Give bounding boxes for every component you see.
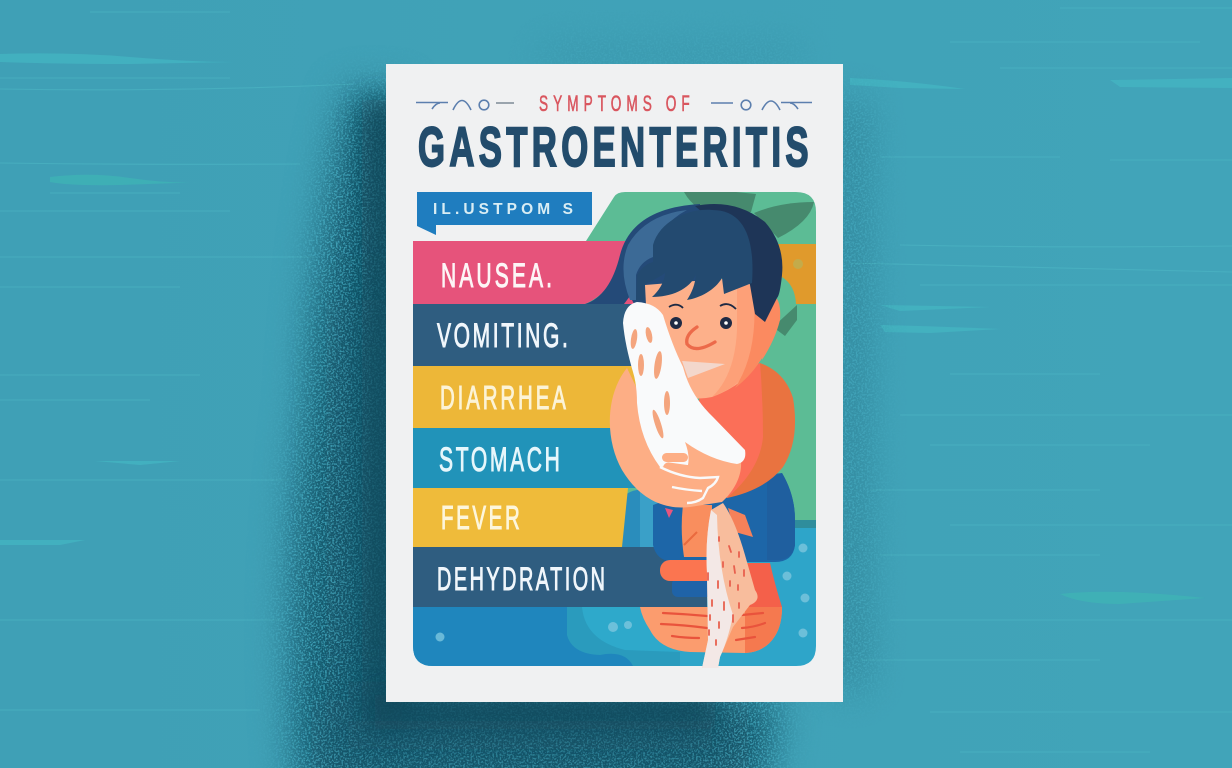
- nose: [687, 327, 715, 349]
- eyes: [669, 304, 736, 329]
- heading ornament right: [711, 100, 812, 110]
- torso centre: [682, 505, 712, 557]
- symptom bar: stomach: STOMACH: [439, 440, 560, 478]
- symptom bar: dehydration: [413, 547, 707, 607]
- leaves: [684, 190, 814, 336]
- symptom bar: fever: [413, 488, 628, 547]
- trousers: [653, 473, 795, 562]
- hair right: [695, 204, 782, 322]
- panel background: [413, 192, 816, 666]
- symptom bar: vomiting: [413, 304, 638, 366]
- hair highlight: [623, 210, 687, 300]
- ear: [762, 293, 780, 360]
- seat behind character: [622, 490, 658, 547]
- towel: [623, 302, 745, 467]
- symptom bar: dehydration: DEHYDRATION: [437, 561, 605, 597]
- symptom bar: fever: FEVER: [441, 499, 520, 536]
- bubbles: [436, 544, 810, 642]
- tag label: IL.USTPOM S: [433, 201, 573, 218]
- shirt tail: [728, 508, 753, 537]
- poster card: [386, 64, 843, 702]
- tag label: [417, 192, 592, 235]
- dripping towel: [702, 503, 758, 668]
- heading ornament left: [416, 100, 514, 110]
- leg lines: [661, 613, 765, 640]
- upper arm: [610, 368, 741, 508]
- symptom bar: vomiting: VOMITING.: [437, 316, 568, 354]
- symptom bar: stomach: [413, 428, 638, 488]
- shirt: [690, 363, 795, 498]
- hair front: [636, 210, 753, 300]
- leg shade: [745, 607, 782, 653]
- face: [645, 275, 771, 399]
- character illustration: [585, 204, 795, 668]
- title: GASTROENTERITIS: [418, 116, 809, 178]
- card drop shadow: [292, 50, 865, 768]
- lower blue: [672, 578, 712, 597]
- symptom bar: nausea: NAUSEA.: [441, 256, 552, 294]
- symptom bar: diarrhea: [413, 366, 638, 428]
- hair back: [585, 204, 702, 304]
- illustration panel: [413, 190, 816, 666]
- legs: [640, 607, 782, 653]
- hand fingers: [660, 453, 718, 503]
- symptom bar: nausea: [413, 241, 628, 304]
- forearm pill: [660, 560, 720, 581]
- subtitle: SYMPTOMS OF: [539, 91, 690, 116]
- lower orange: [733, 563, 782, 607]
- mouth wedge: [682, 361, 725, 378]
- symptom bar: diarrhea: DIARRHEA: [440, 379, 566, 416]
